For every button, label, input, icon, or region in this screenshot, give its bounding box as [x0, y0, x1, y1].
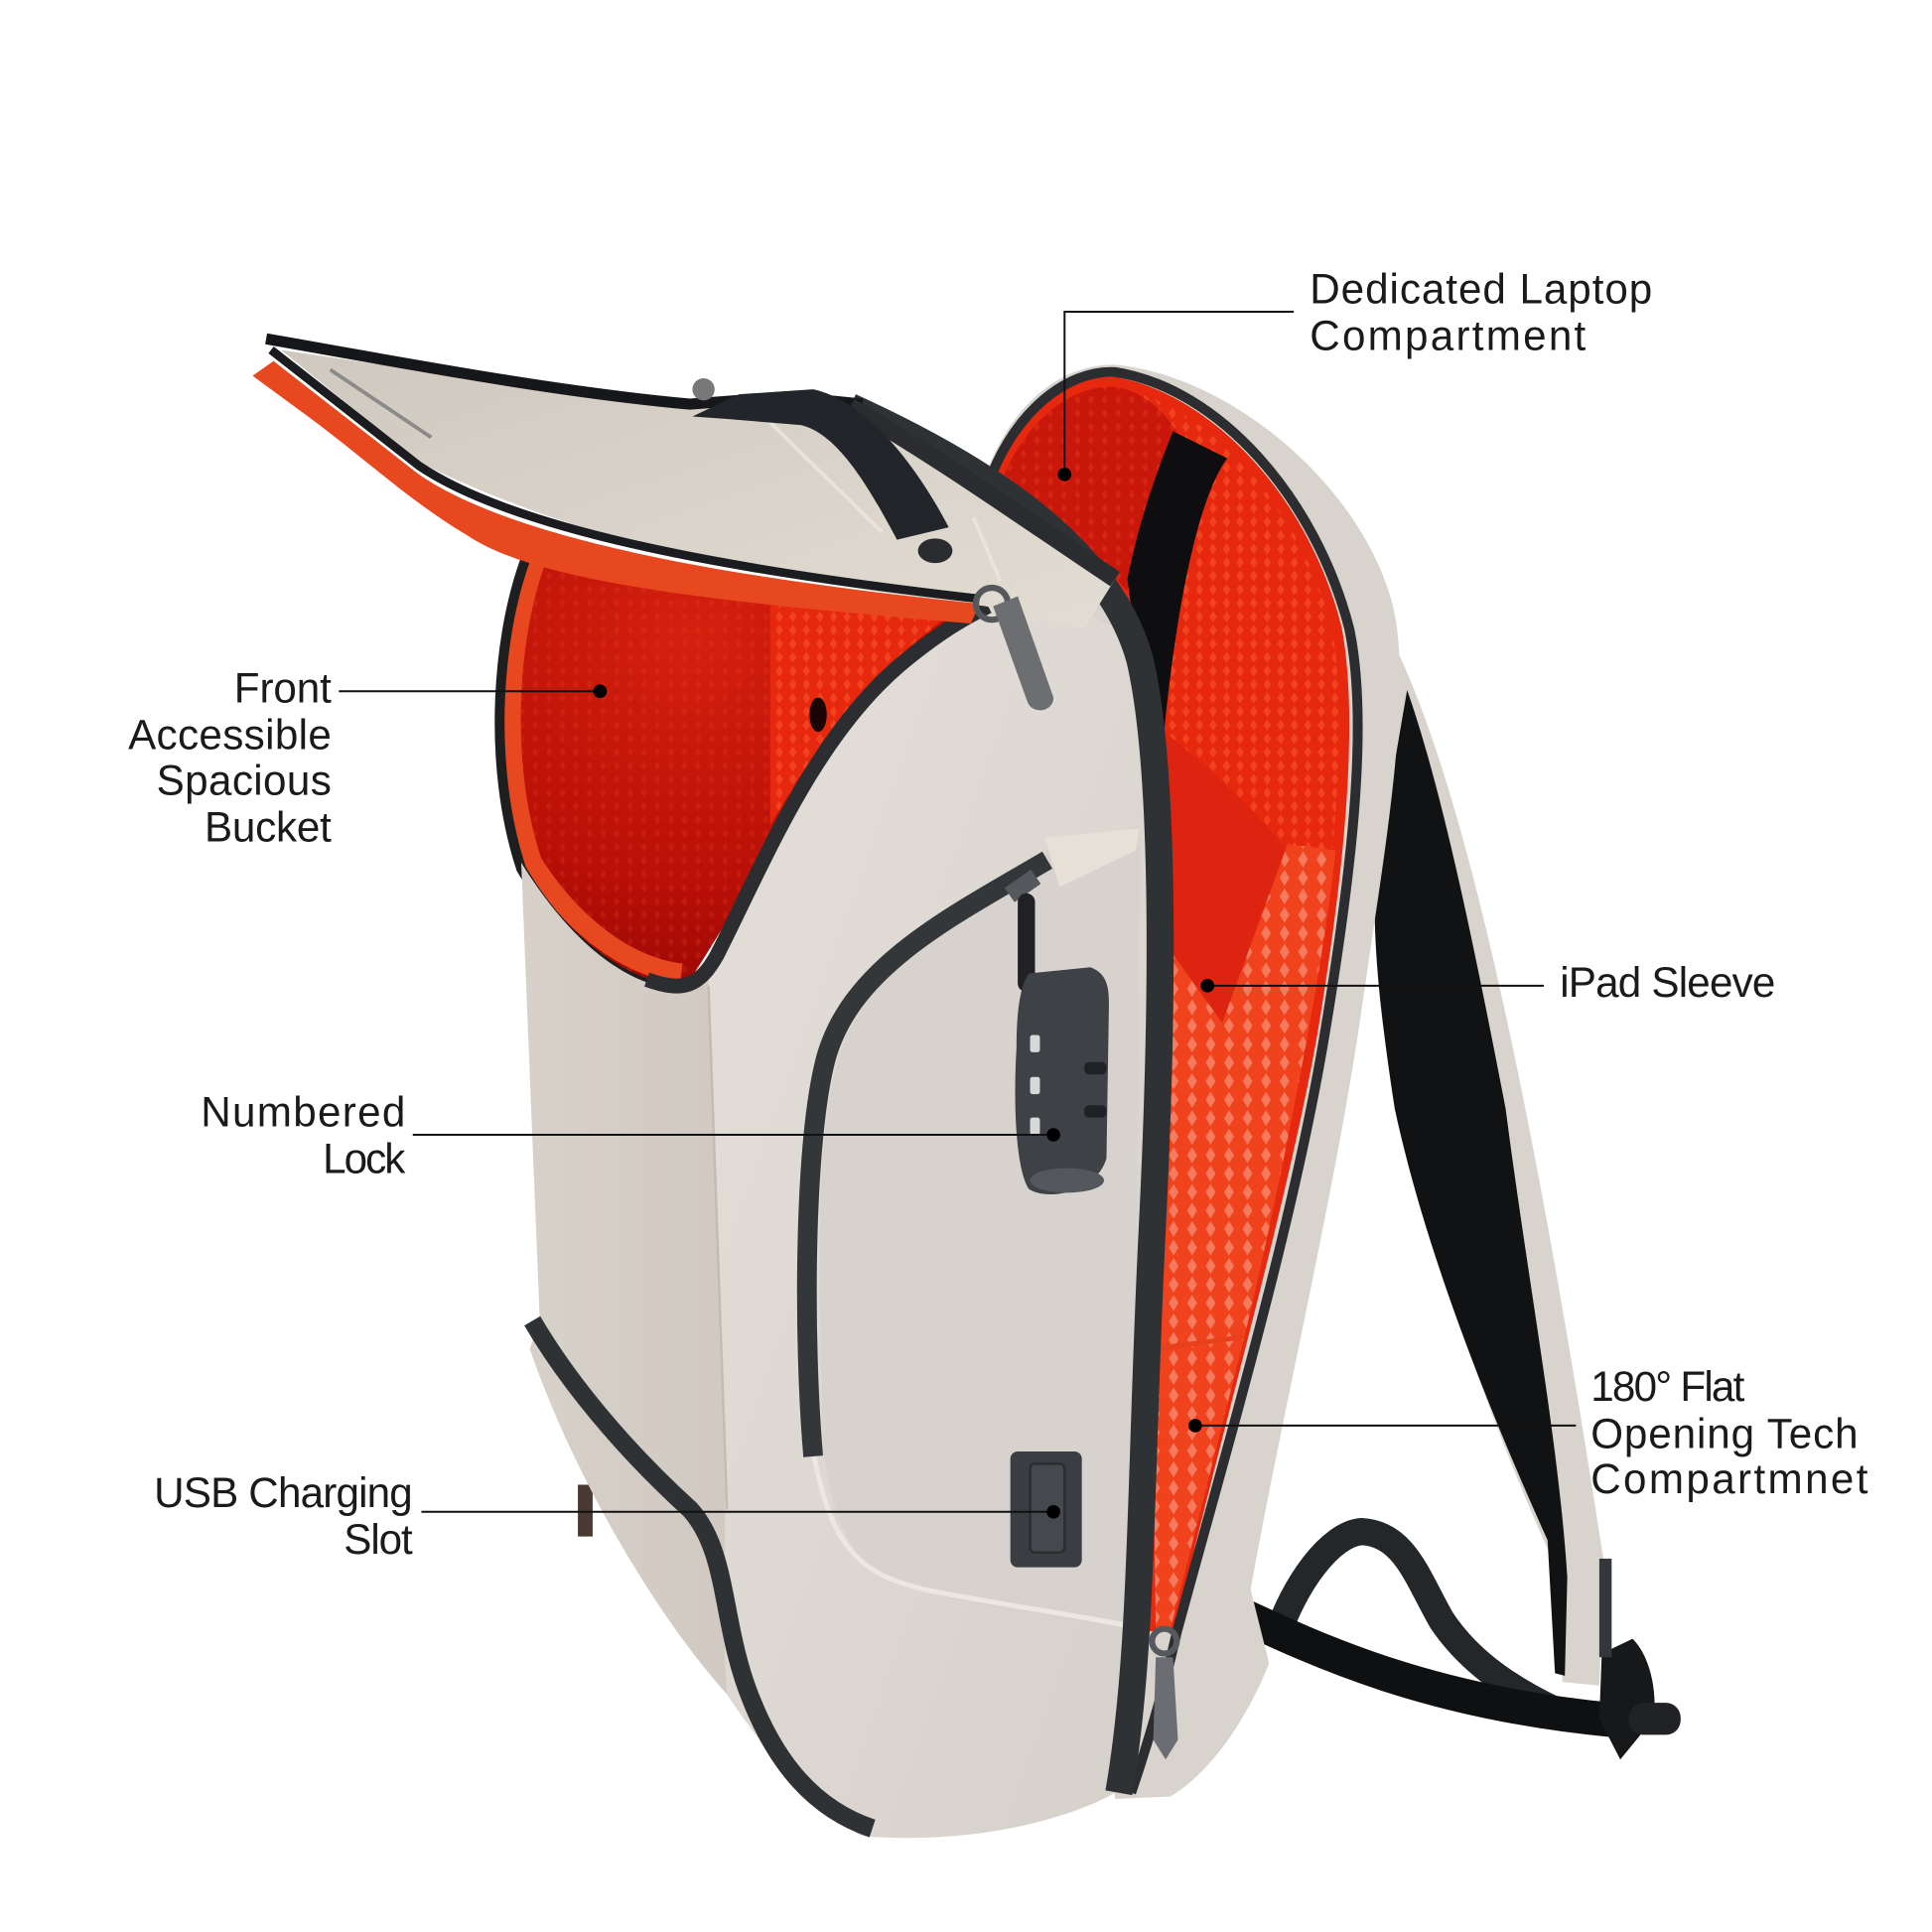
callout: numbered lock: Lock	[323, 1135, 406, 1181]
callout: numbered lock	[201, 1088, 1060, 1181]
callout: iPad sleeve: iPad Sleeve	[1560, 959, 1775, 1006]
callout: iPad sleeve	[1200, 959, 1775, 1006]
backpack feet	[578, 1484, 593, 1537]
pocket panel	[807, 826, 1140, 1626]
callout: 180 degree flat opening tech compartment: 180° Flat	[1590, 1363, 1745, 1410]
front bucket zipper	[647, 607, 988, 986]
callout: front accessible spacious bucket: Front	[234, 664, 332, 711]
callout: front accessible spacious bucket: Accessible	[128, 712, 332, 759]
iPad sleeve	[1152, 727, 1335, 1629]
bottom zip pull	[1152, 1629, 1177, 1759]
top zip pull	[976, 588, 1053, 710]
callout: front accessible spacious bucket	[128, 664, 607, 851]
top handle	[692, 389, 949, 540]
webbing loop and lower strap	[1235, 1532, 1614, 1721]
numbered lock	[1016, 967, 1109, 1194]
laptop compartment interior	[1001, 382, 1344, 1626]
top flap	[252, 339, 1115, 628]
callout: dedicated laptop compartment: Dedicated Laptop	[1310, 265, 1652, 312]
main body	[521, 579, 1162, 1838]
back panel zipper rim	[992, 372, 1358, 1793]
shoulder strap	[1375, 640, 1604, 1686]
laptop strap band	[1128, 431, 1227, 730]
callout: front accessible spacious bucket: Bucket	[205, 804, 332, 851]
zipper puller on flap tip	[692, 378, 715, 400]
main zipper band	[850, 407, 1161, 1793]
pocket zip pull	[1005, 870, 1040, 992]
back panel	[986, 364, 1400, 1799]
callout: front accessible spacious bucket: Spacious	[157, 757, 332, 803]
bottom trim zipper	[532, 1320, 873, 1829]
callout: USB charging slot: USB Charging	[154, 1469, 413, 1516]
callout: dedicated laptop compartment	[1057, 265, 1652, 482]
callout: 180 degree flat opening tech compartment: Opening Tech	[1590, 1410, 1859, 1456]
USB charging slot	[1011, 1451, 1082, 1568]
callout: USB charging slot: Slot	[344, 1516, 413, 1563]
callout: numbered lock: Numbered	[201, 1088, 405, 1135]
strap buckle	[1599, 1559, 1681, 1759]
callout: dedicated laptop compartment: Compartment	[1310, 312, 1587, 358]
snap button	[918, 538, 952, 563]
front bucket interior	[499, 548, 980, 991]
callout: USB charging slot	[154, 1469, 1060, 1563]
callout: 180 degree flat opening tech compartment	[1188, 1363, 1868, 1502]
callout: 180 degree flat opening tech compartment: Compartmnet	[1590, 1455, 1868, 1502]
